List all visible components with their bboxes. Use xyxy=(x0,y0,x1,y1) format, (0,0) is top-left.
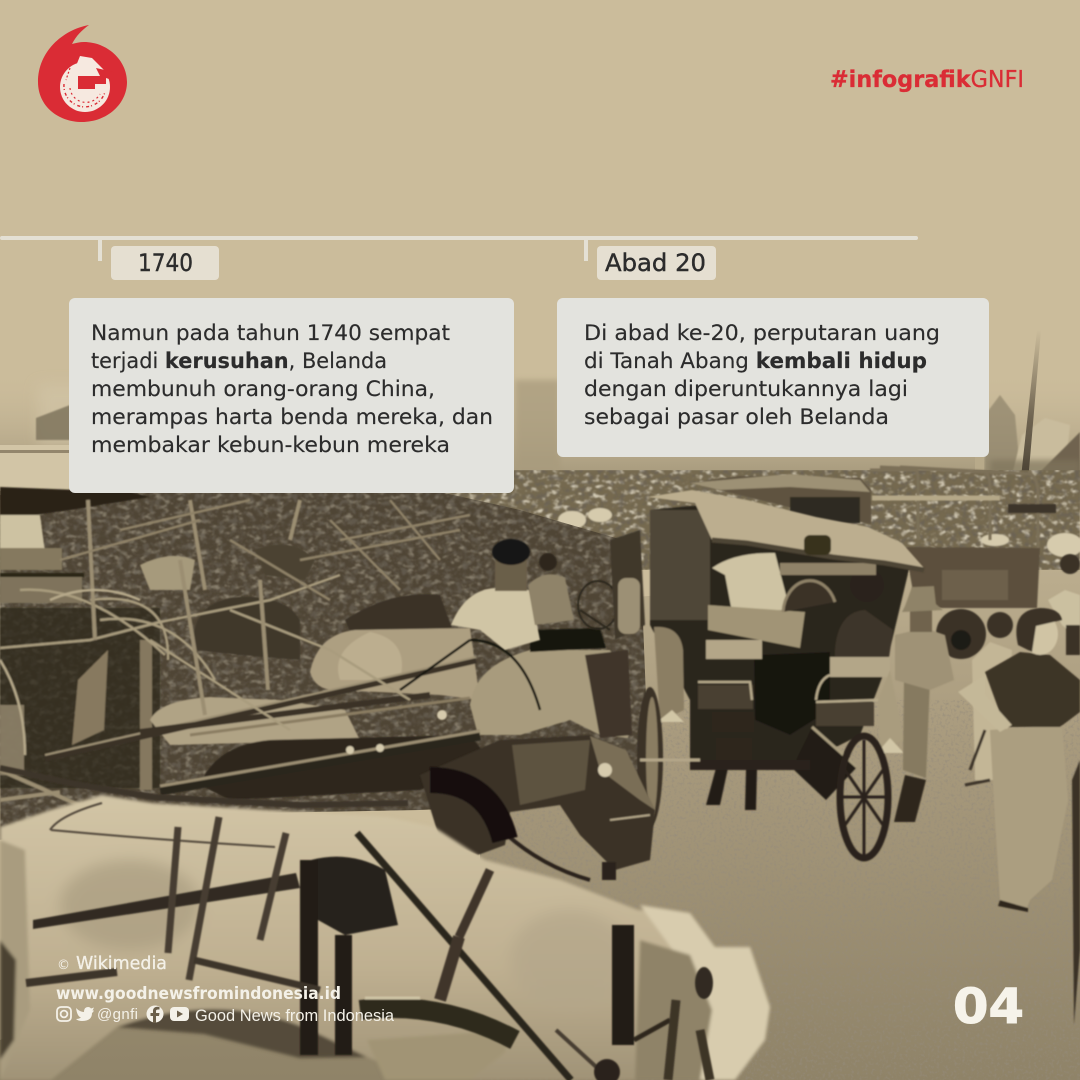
tangle of parked carriages and shafts xyxy=(0,480,660,840)
driver xyxy=(712,553,790,612)
man at right edge xyxy=(1048,554,1080,655)
background crowd xyxy=(430,470,1080,570)
brand name: Good News from Indonesia xyxy=(195,1006,395,1025)
harness on the white horse xyxy=(0,768,713,1080)
carriage in the centre xyxy=(637,490,924,858)
label: Abad 20 xyxy=(597,246,716,280)
label: 1740 xyxy=(111,246,219,280)
brown horse head in harness xyxy=(420,735,655,880)
footer credits xyxy=(56,953,395,1025)
label: 1740: 1740 xyxy=(138,249,193,277)
man in white shirt xyxy=(451,539,540,650)
footboard flap xyxy=(792,727,857,800)
logo: red swirl xyxy=(38,25,127,122)
card: 1740 xyxy=(69,298,514,493)
card: 1740: merampas harta benda mereka, dan xyxy=(91,405,493,429)
card: Abad 20: di Tanah Abang kembali hidup xyxy=(584,349,927,373)
pale horse body xyxy=(310,628,480,700)
truck in background xyxy=(690,467,1056,659)
woman standing xyxy=(958,608,1080,1025)
icon: twitter xyxy=(76,1007,94,1021)
shafts xyxy=(45,660,476,758)
dark horse second row xyxy=(200,735,490,800)
left fender xyxy=(654,627,684,722)
page number: 04 xyxy=(953,979,1024,1035)
man with hat xyxy=(894,586,954,822)
passenger and dark clothes xyxy=(835,610,893,665)
left seat panels xyxy=(0,575,82,603)
logo: white garuda ring xyxy=(60,56,114,112)
hashtag: #infografikGNFI xyxy=(830,65,1024,93)
white horse with black mane xyxy=(470,650,630,738)
card: 1740: membakar kebun-kebun mereka xyxy=(91,433,450,457)
website: www.goodnewsfromindonesia.id xyxy=(56,984,341,1004)
card: 1740: terjadi kerusuhan, Belanda xyxy=(91,349,387,373)
card: Abad 20: sebagai pasar oleh Belanda xyxy=(584,405,889,429)
right wheel xyxy=(840,736,888,858)
card: Abad 20 xyxy=(557,298,989,457)
white horse in the foreground xyxy=(0,795,770,1080)
rear wheel hoop xyxy=(783,581,835,612)
icon: instagram xyxy=(57,1007,71,1021)
seat backs xyxy=(708,605,805,648)
left carriage roof xyxy=(0,487,150,520)
icon: facebook xyxy=(146,1006,164,1023)
child behind woman xyxy=(965,612,1013,785)
distant hazy buildings and trees xyxy=(0,330,1080,510)
roof xyxy=(647,490,924,568)
icon: youtube xyxy=(170,1007,189,1021)
left wheel xyxy=(637,687,663,827)
photo: horse-drawn carriages at Tanah Abang market xyxy=(0,330,1080,1080)
credit name: Wikimedia xyxy=(76,953,167,974)
card: Abad 20: dengan diperuntukannya lagi xyxy=(584,377,908,401)
dark-maned horse xyxy=(345,594,452,632)
people near the carriage xyxy=(528,530,645,640)
ornaments xyxy=(346,746,354,754)
photo credit: © xyxy=(57,958,70,973)
handle: @gnfi xyxy=(97,1006,138,1023)
card: Abad 20: Di abad ke-20, perputaran uang xyxy=(584,321,940,345)
header logo xyxy=(38,25,127,122)
ornamental valance xyxy=(780,563,876,575)
card: 1740: membunuh orang-orang China, xyxy=(91,377,435,401)
ground xyxy=(0,560,1080,1080)
timeline xyxy=(0,236,918,280)
right fender xyxy=(878,670,904,748)
label: Abad 20: Abad 20 xyxy=(605,249,706,277)
card: 1740: Namun pada tahun 1740 sempat xyxy=(91,321,450,345)
brown horse xyxy=(193,597,300,660)
pulling horse legs xyxy=(706,768,757,810)
carriage body xyxy=(650,505,910,770)
